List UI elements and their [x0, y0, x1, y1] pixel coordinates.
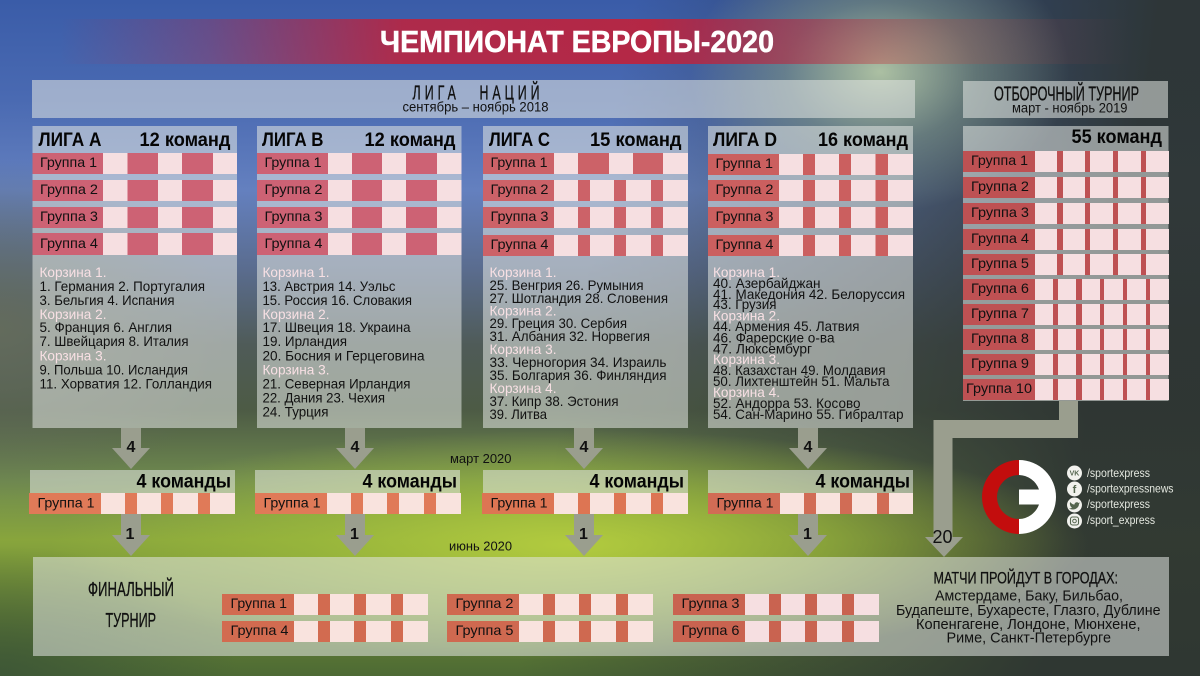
arrow: B to playoff: 4	[351, 439, 360, 456]
panel: Лига D: ЛИГА D	[713, 130, 777, 151]
panel: Лига A: ЛИГА А	[38, 130, 102, 151]
group row 5: Группа 5	[971, 255, 1029, 271]
panel: отборочный турнир, группы	[963, 126, 1169, 401]
team list: Корзина 3.	[262, 362, 330, 378]
team list: 25. Венгрия 26. Румыния	[490, 277, 644, 293]
arrow: C to playoff	[565, 428, 603, 469]
team list: 24. Турция	[262, 404, 328, 420]
playoff panel C	[482, 470, 688, 514]
team list: 9. Польша 10. Исландия	[40, 362, 188, 378]
panel: Лига D	[708, 126, 913, 428]
playoff panel D: Группа 1	[716, 494, 774, 510]
team list: 1. Германия 2. Португалия	[40, 278, 205, 294]
social links	[1067, 466, 1174, 528]
group row 4: Группа 4	[490, 236, 549, 252]
team list: 52. Андорра 53. Косово	[713, 395, 861, 411]
heading: финальный турнир	[88, 577, 174, 632]
host cities: Копенгагене, Лондоне, Мюнхене,	[916, 617, 1140, 633]
group row 3	[257, 207, 462, 228]
group row 2: Группа 2	[264, 181, 323, 197]
group row 1	[483, 153, 688, 174]
arrow: C to final: 1	[579, 526, 588, 543]
playoff panel A	[29, 470, 235, 514]
team list: Корзина 4.	[713, 384, 780, 400]
final group 2	[447, 594, 653, 615]
playoff panel A: Группа 1	[38, 494, 95, 510]
vk: VK	[1070, 470, 1079, 478]
final group 3: Группа 3	[682, 595, 740, 611]
team list: 48. Казахстан 49. Молдавия	[713, 362, 886, 378]
group row 4	[708, 235, 913, 256]
group row 5	[963, 254, 1169, 275]
team list: 11. Хорватия 12. Голландия	[40, 376, 212, 392]
playoff panel B: Группа 1	[264, 494, 321, 510]
arrow: A to playoff: 4	[127, 439, 136, 456]
team list: 39. Литва	[490, 406, 547, 422]
group row 1	[708, 154, 913, 175]
date: июнь 2020: июнь 2020	[449, 538, 512, 554]
team list: 37. Кипр 38. Эстония	[490, 393, 618, 409]
group row 3: Группа 3	[40, 208, 98, 224]
logo	[982, 460, 1056, 534]
team list: 46. Фарерские о-ва	[713, 330, 835, 346]
instagram: /sport_express	[1087, 513, 1155, 527]
group row 4: Группа 4	[971, 230, 1029, 246]
arrow: B to final: 1	[350, 526, 359, 543]
group row 2	[483, 180, 688, 201]
playoff panel B	[255, 470, 461, 514]
team list: Корзина 1.	[262, 264, 330, 280]
group row 1: Группа 1	[971, 152, 1028, 168]
panel: Лига B: 12 команд	[364, 130, 456, 151]
group row 10	[963, 379, 1169, 400]
playoff panel B: 4 команды	[362, 472, 457, 492]
team list	[262, 264, 425, 420]
group row 8	[963, 329, 1169, 350]
arrow: A to final: 1	[126, 526, 135, 543]
group row 6: Группа 6	[971, 280, 1029, 296]
team list: 31. Албания 32. Норвегия	[490, 328, 650, 344]
group row 3	[32, 207, 237, 228]
team list: 27. Шотландия 28. Словения	[490, 290, 668, 306]
group row 3	[963, 203, 1169, 224]
group row 9	[963, 354, 1169, 375]
playoff panel D: 4 команды	[816, 472, 910, 492]
heading: Лига наций: ЛИГА	[412, 81, 457, 104]
group row 2: Группа 2	[490, 181, 549, 197]
host cities	[896, 568, 1160, 646]
group row 2	[32, 180, 237, 201]
final group 4: Группа 4	[230, 622, 289, 638]
team list: 54. Сан-Марино 55. Гибралтар	[713, 406, 904, 422]
team list: 19. Ирландия	[262, 333, 347, 349]
team list	[490, 264, 668, 422]
team list: 17. Швеция 18. Украина	[262, 319, 411, 335]
team list: 5. Франция 6. Англия	[40, 319, 172, 335]
playoff panel C: 4 команды	[590, 472, 684, 492]
panel: Лига A: 12 команд	[140, 130, 230, 151]
panel: Лига C	[483, 126, 688, 428]
team list: Корзина 2.	[262, 306, 330, 322]
title: ЧЕМПИОНАТ ЕВРОПЫ-2020	[380, 24, 774, 59]
team list: 22. Дания 23. Чехия	[262, 390, 385, 406]
panel: Лига B: ЛИГА В	[262, 130, 324, 151]
twitter: /sportexpress	[1087, 497, 1150, 511]
group row 7	[963, 304, 1169, 325]
panel: финальный турнир	[33, 557, 1169, 656]
title	[60, 19, 1130, 64]
final group 3	[673, 594, 879, 615]
team list: Корзина 3.	[713, 351, 780, 367]
group row 4: Группа 4	[264, 235, 323, 251]
panel: Лига C: ЛИГА С	[489, 130, 550, 151]
team list: Корзина 2.	[490, 302, 556, 318]
host cities: МАТЧИ ПРОЙДУТ В ГОРОДАХ:	[934, 568, 1118, 588]
team list: Корзина 3.	[40, 348, 106, 364]
group row 1	[963, 151, 1169, 172]
group row 6	[963, 279, 1169, 300]
group row 4: Группа 4	[40, 235, 98, 251]
group row 2	[257, 180, 462, 201]
group row 4: Группа 4	[716, 236, 774, 252]
arrow: A to final	[112, 514, 150, 556]
group row 2: Группа 2	[716, 181, 774, 197]
team list: Корзина 2.	[40, 306, 106, 322]
team list: 47. Люксембург	[713, 340, 812, 356]
panel: Лига C: 15 команд	[590, 130, 682, 151]
group row 3	[708, 207, 913, 228]
group row 3: Группа 3	[490, 208, 549, 224]
arrow: C to final	[565, 514, 603, 556]
team list: Корзина 2.	[713, 308, 780, 324]
arrow: D to playoff: 4	[804, 439, 813, 456]
arrow: B to playoff	[336, 428, 374, 469]
team list: 3. Бельгия 4. Испания	[40, 292, 174, 308]
vk	[1067, 466, 1150, 480]
team list: Корзина 1.	[40, 264, 106, 280]
group row 2	[963, 177, 1169, 198]
facebook: f	[1073, 484, 1077, 496]
arrow: qualifying to final: 20	[932, 527, 953, 547]
arrow: D to final: 1	[803, 526, 812, 543]
heading: Лига наций: сентябрь – ноябрь 2018	[402, 98, 549, 114]
heading: финальный турнир: ФИНАЛЬНЫЙ	[88, 577, 174, 601]
arrow: qualifying to final	[925, 401, 1078, 557]
host cities: Будапеште, Бухаресте, Глазго, Дублине	[896, 603, 1160, 619]
host cities: Риме, Санкт-Петербурге	[946, 630, 1111, 646]
team list: 21. Северная Ирландия	[262, 376, 410, 392]
team list: Корзина 3.	[490, 341, 556, 357]
group row 4	[963, 229, 1169, 250]
final group 6	[673, 621, 879, 642]
final group 1	[222, 594, 428, 615]
team list: 7. Швейцария 8. Италия	[40, 333, 188, 349]
team list: Корзина 1.	[713, 264, 780, 280]
group row 3	[483, 207, 688, 228]
final group 2: Группа 2	[456, 595, 514, 611]
group row 2: Группа 2	[971, 178, 1029, 194]
team list: 33. Черногория 34. Израиль	[490, 354, 666, 370]
final group 5: Группа 5	[456, 622, 514, 638]
panel: Лига B	[257, 126, 462, 428]
group row 7: Группа 7	[971, 305, 1029, 321]
final group 4	[222, 621, 428, 642]
final group 5	[447, 621, 653, 642]
team list: Корзина 4.	[490, 380, 556, 396]
team list	[40, 264, 212, 392]
team list: 43. Грузия	[713, 296, 776, 312]
heading: Отборочный турнир: март - ноябрь 2019	[1012, 100, 1128, 116]
final group 6: Группа 6	[682, 622, 740, 638]
group row 9: Группа 9	[971, 355, 1029, 371]
group row 1	[32, 153, 237, 174]
group row 1: Группа 1	[264, 154, 322, 170]
team list: 20. Босния и Герцеговина	[262, 348, 425, 364]
group row 1: Группа 1	[490, 154, 548, 170]
group row 4	[32, 233, 237, 255]
group row 1: Группа 1	[40, 154, 97, 170]
group row 1	[257, 153, 462, 174]
arrow: D to playoff	[789, 428, 827, 469]
playoff panel D	[708, 470, 913, 514]
heading: финальный турнир: ТУРНИР	[106, 610, 156, 632]
playoff panel A: 4 команды	[136, 472, 231, 492]
group row 2: Группа 2	[40, 181, 98, 197]
team list	[713, 264, 905, 422]
team list: 50. Лихтенштейн 51. Мальта	[713, 373, 890, 389]
team list: Корзина 1.	[490, 264, 556, 280]
group row 8: Группа 8	[971, 330, 1029, 346]
heading: Лига наций: НАЦИЙ	[479, 81, 540, 104]
date: март 2020: март 2020	[450, 451, 512, 466]
team list: 44. Армения 45. Латвия	[713, 318, 860, 334]
team list: 41. Македония 42. Белоруссия	[713, 286, 905, 302]
group row 4	[483, 235, 688, 256]
group row 3: Группа 3	[716, 208, 774, 224]
facebook: /sportexpressnews	[1087, 482, 1174, 496]
panel: Лига A	[32, 126, 237, 428]
heading: Отборочный турнир	[963, 81, 1168, 118]
facebook	[1067, 482, 1174, 496]
group row 1: Группа 1	[716, 155, 773, 171]
team list: 13. Австрия 14. Уэльс	[262, 278, 396, 294]
group row 2	[708, 180, 913, 201]
panel: Лига D: 16 команд	[818, 130, 908, 151]
team list: 40. Азербайджан	[713, 275, 820, 291]
team list: 35. Болгария 36. Финляндия	[490, 367, 666, 383]
final group 1: Группа 1	[230, 595, 287, 611]
vk: /sportexpress	[1087, 466, 1150, 480]
host cities: Амстердаме, Баку, Бильбао,	[935, 588, 1123, 604]
playoff panel C: Группа 1	[490, 494, 548, 510]
arrow: C to playoff: 4	[580, 439, 589, 456]
arrow: B to final	[336, 514, 374, 556]
group row 10: Группа 10	[966, 380, 1032, 396]
group row 3: Группа 3	[971, 204, 1029, 220]
arrow: A to playoff	[112, 428, 150, 469]
panel: отборочный турнир, группы: 55 команд	[1072, 127, 1162, 148]
arrow: D to final	[789, 514, 827, 556]
team list: 29. Греция 30. Сербия	[490, 315, 627, 331]
group row 3: Группа 3	[264, 208, 323, 224]
group row 4	[257, 233, 462, 255]
team list: 15. Россия 16. Словакия	[262, 292, 412, 308]
heading: Лига наций	[32, 80, 915, 118]
